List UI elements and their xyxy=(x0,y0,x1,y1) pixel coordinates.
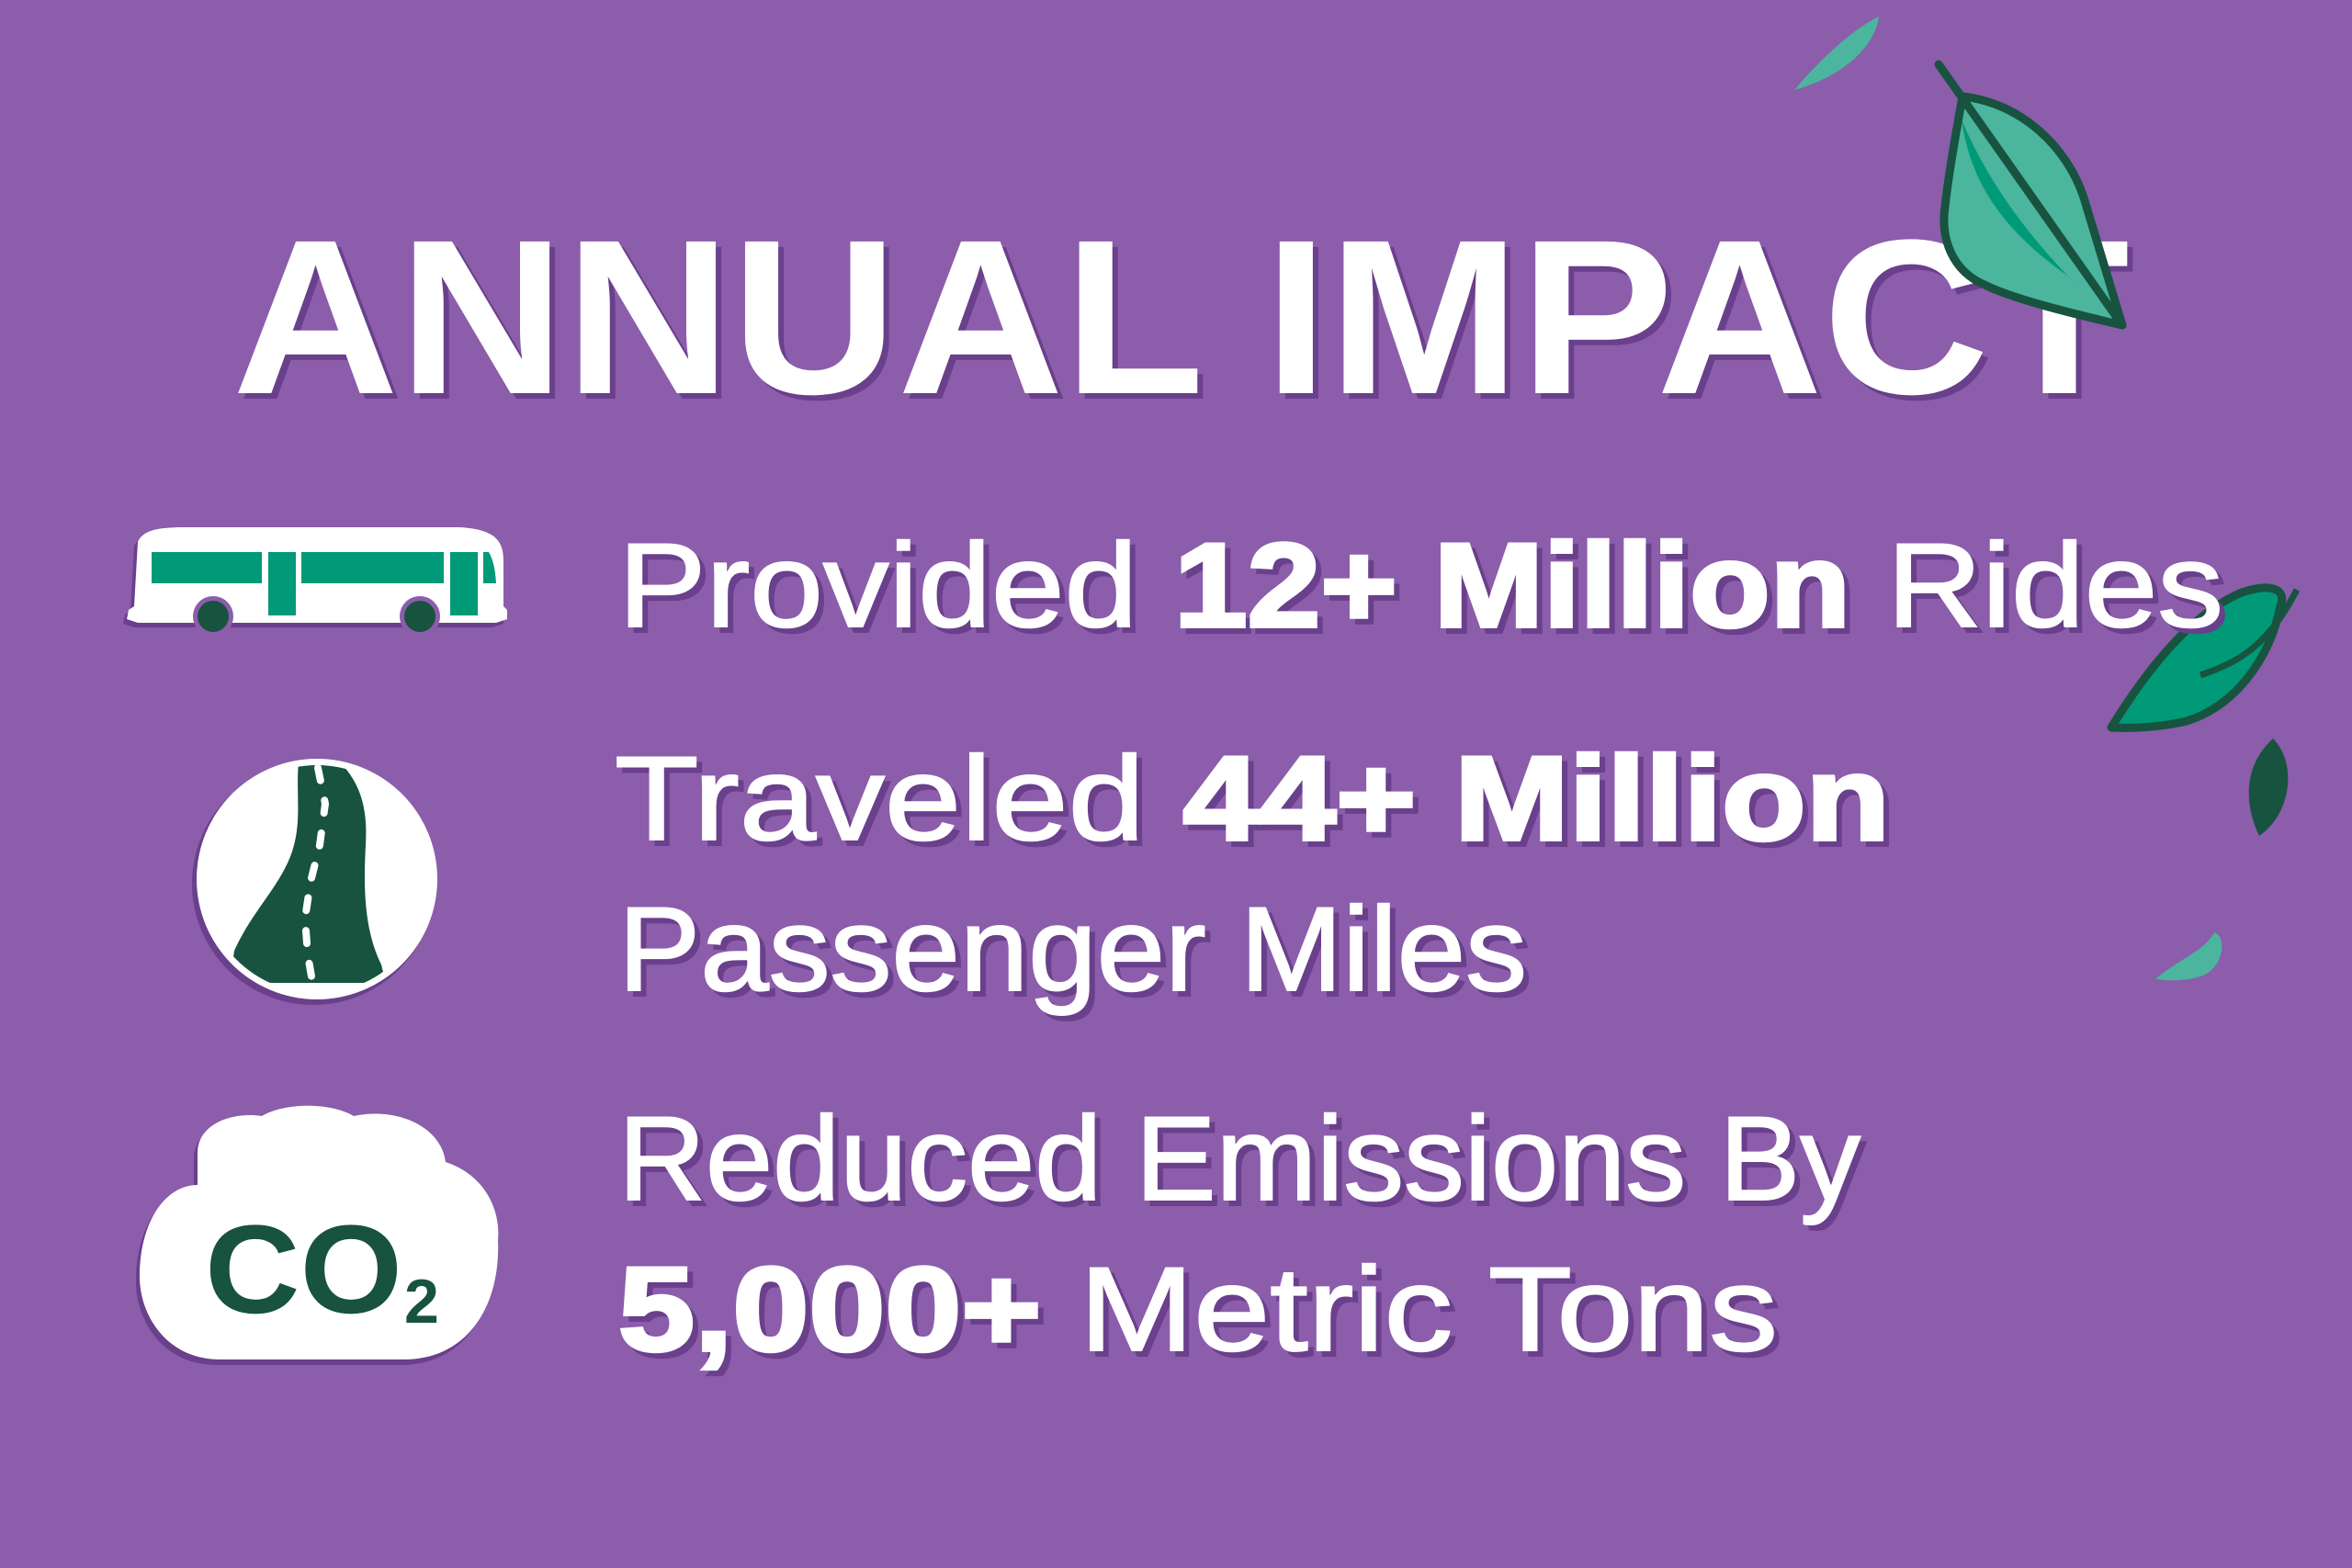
text: passenger miles: Traveled 44+ Million xyxy=(615,731,1890,865)
text: rides: Provided 12+ Million Rides xyxy=(618,518,2223,652)
icon: CO2 cloud xyxy=(136,1106,498,1365)
leaf: large top right xyxy=(1939,64,2122,325)
text: emissions: Reduced Emissions By xyxy=(618,1091,1860,1225)
icon: bus xyxy=(123,527,507,637)
text: emissions: 5,000+ Metric Tons xyxy=(618,1242,1778,1376)
leaf: middle right xyxy=(2111,588,2297,728)
icon: CO2 cloud: CO xyxy=(205,1200,402,1340)
text: passenger miles: Passenger Miles xyxy=(618,882,1527,1016)
leaf: small top xyxy=(1794,17,1879,90)
icon: CO2 cloud: 2 xyxy=(404,1267,439,1337)
title: ANNUAL IMPACT xyxy=(232,194,2130,440)
icon: road xyxy=(192,759,437,1005)
text: passenger miles xyxy=(615,731,1890,1016)
leaf: small dark xyxy=(2249,739,2288,836)
text: emissions xyxy=(618,1091,1860,1376)
leaf: small bottom xyxy=(2155,932,2222,980)
